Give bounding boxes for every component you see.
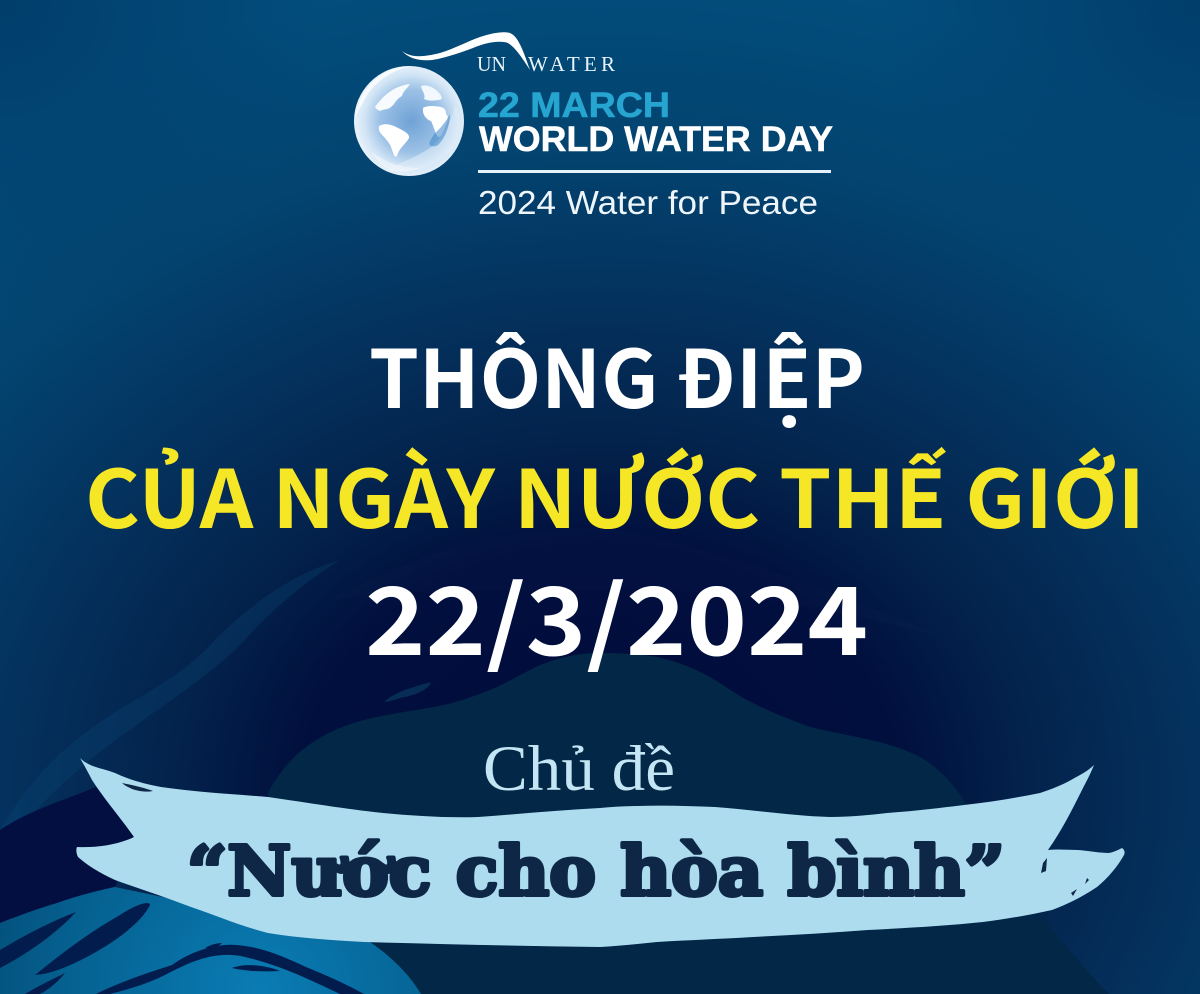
UN Water logo xyxy=(354,32,833,221)
left pool xyxy=(0,887,421,994)
dome hill xyxy=(268,653,1109,994)
title line 2: CỦA NGÀY NƯỚC THẾ GIỚI xyxy=(85,436,1145,552)
ribbon shape xyxy=(76,758,1125,947)
WATER wordmark: WATER xyxy=(528,52,615,76)
icon: water swoosh xyxy=(402,32,530,70)
ribbon text: “Nước cho hòa bình” xyxy=(187,832,1005,912)
UN wordmark: UN xyxy=(477,52,506,76)
theme label: Chủ đề xyxy=(483,733,675,805)
icon: globe xyxy=(354,66,464,176)
title date: 22/3/2024 xyxy=(365,547,868,683)
ribbon banner xyxy=(76,758,1125,947)
logo divider xyxy=(478,170,831,173)
World Water Day: WORLD WATER DAY xyxy=(479,120,833,159)
date: 22 March: 22 MARCH xyxy=(478,86,670,125)
title xyxy=(85,316,1145,683)
2024 tagline: 2024 Water for Peace xyxy=(478,184,818,221)
title line 1: THÔNG ĐIỆP xyxy=(369,316,865,432)
ribbon specks xyxy=(122,783,1089,896)
